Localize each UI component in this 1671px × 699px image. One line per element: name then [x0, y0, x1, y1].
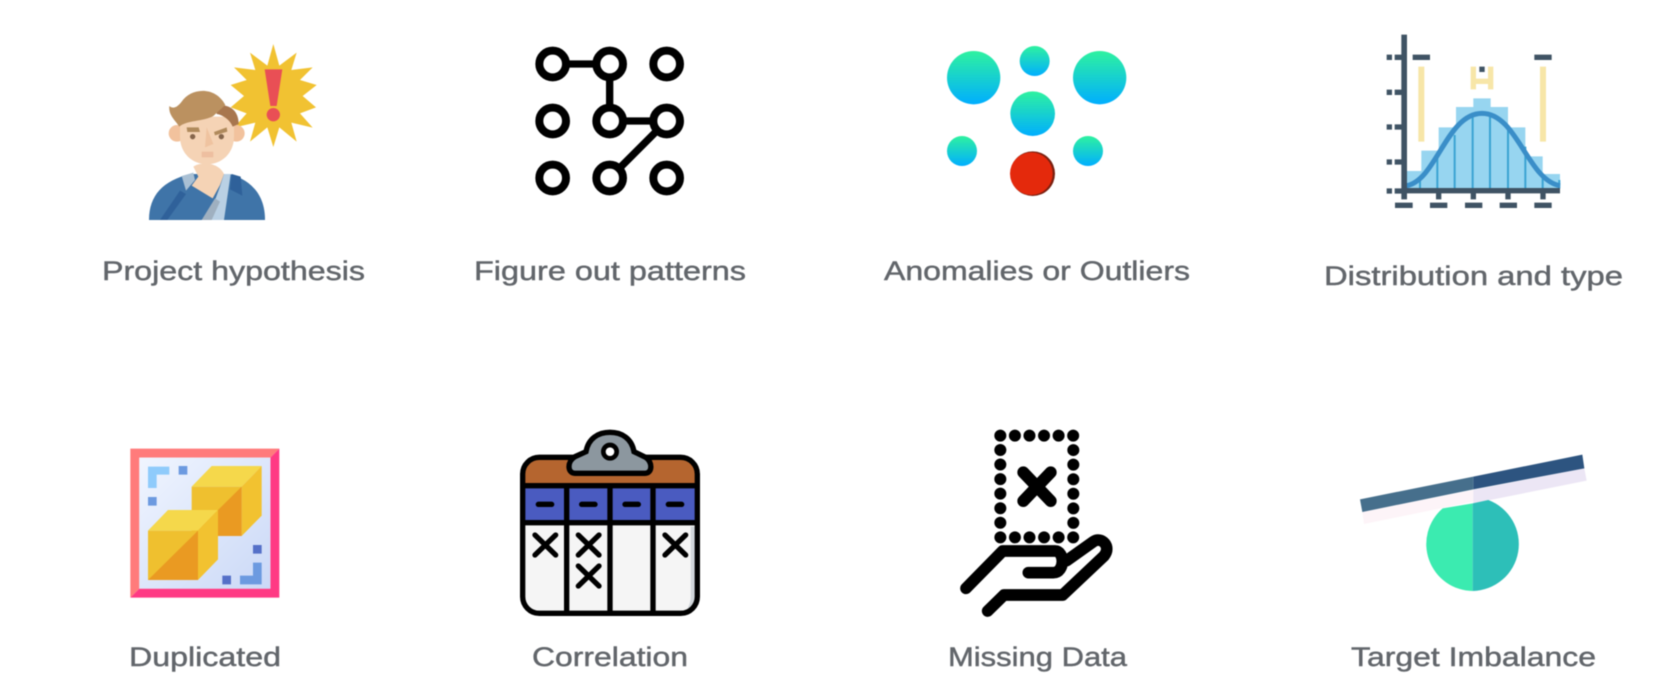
- icon: clipboard table with crosses: [523, 432, 697, 613]
- label: Figure out patterns: [474, 256, 746, 286]
- icon: framed duplicate cubes: [130, 449, 279, 598]
- label: Anomalies or Outliers: [884, 256, 1190, 286]
- label: Duplicated: [129, 642, 281, 672]
- icon: hand holding dotted box with cross: [966, 436, 1107, 611]
- label: Distribution and type: [1324, 261, 1623, 291]
- panel: Missing Data: [948, 436, 1128, 672]
- icon: thinking man with alert burst: [149, 44, 317, 220]
- label: Correlation: [532, 642, 688, 672]
- panel: Anomalies or Outliers: [884, 46, 1190, 286]
- label: Missing Data: [948, 642, 1128, 672]
- label: Target Imbalance: [1351, 642, 1596, 672]
- panel: Duplicated: [129, 449, 281, 672]
- icon: tilted bar balanced on ball: [1360, 455, 1587, 591]
- panel: Correlation: [523, 432, 697, 672]
- panel: Distribution and type: [1324, 35, 1623, 291]
- panel: Project hypothesis: [102, 44, 365, 286]
- icon: dot cluster with red outlier: [947, 46, 1126, 196]
- panel: Figure out patterns: [474, 51, 746, 286]
- icon: connected dot pattern: [539, 51, 680, 191]
- label: Project hypothesis: [102, 256, 365, 286]
- panel: Target Imbalance: [1351, 455, 1596, 672]
- icon: histogram with bell curve: [1387, 35, 1560, 208]
